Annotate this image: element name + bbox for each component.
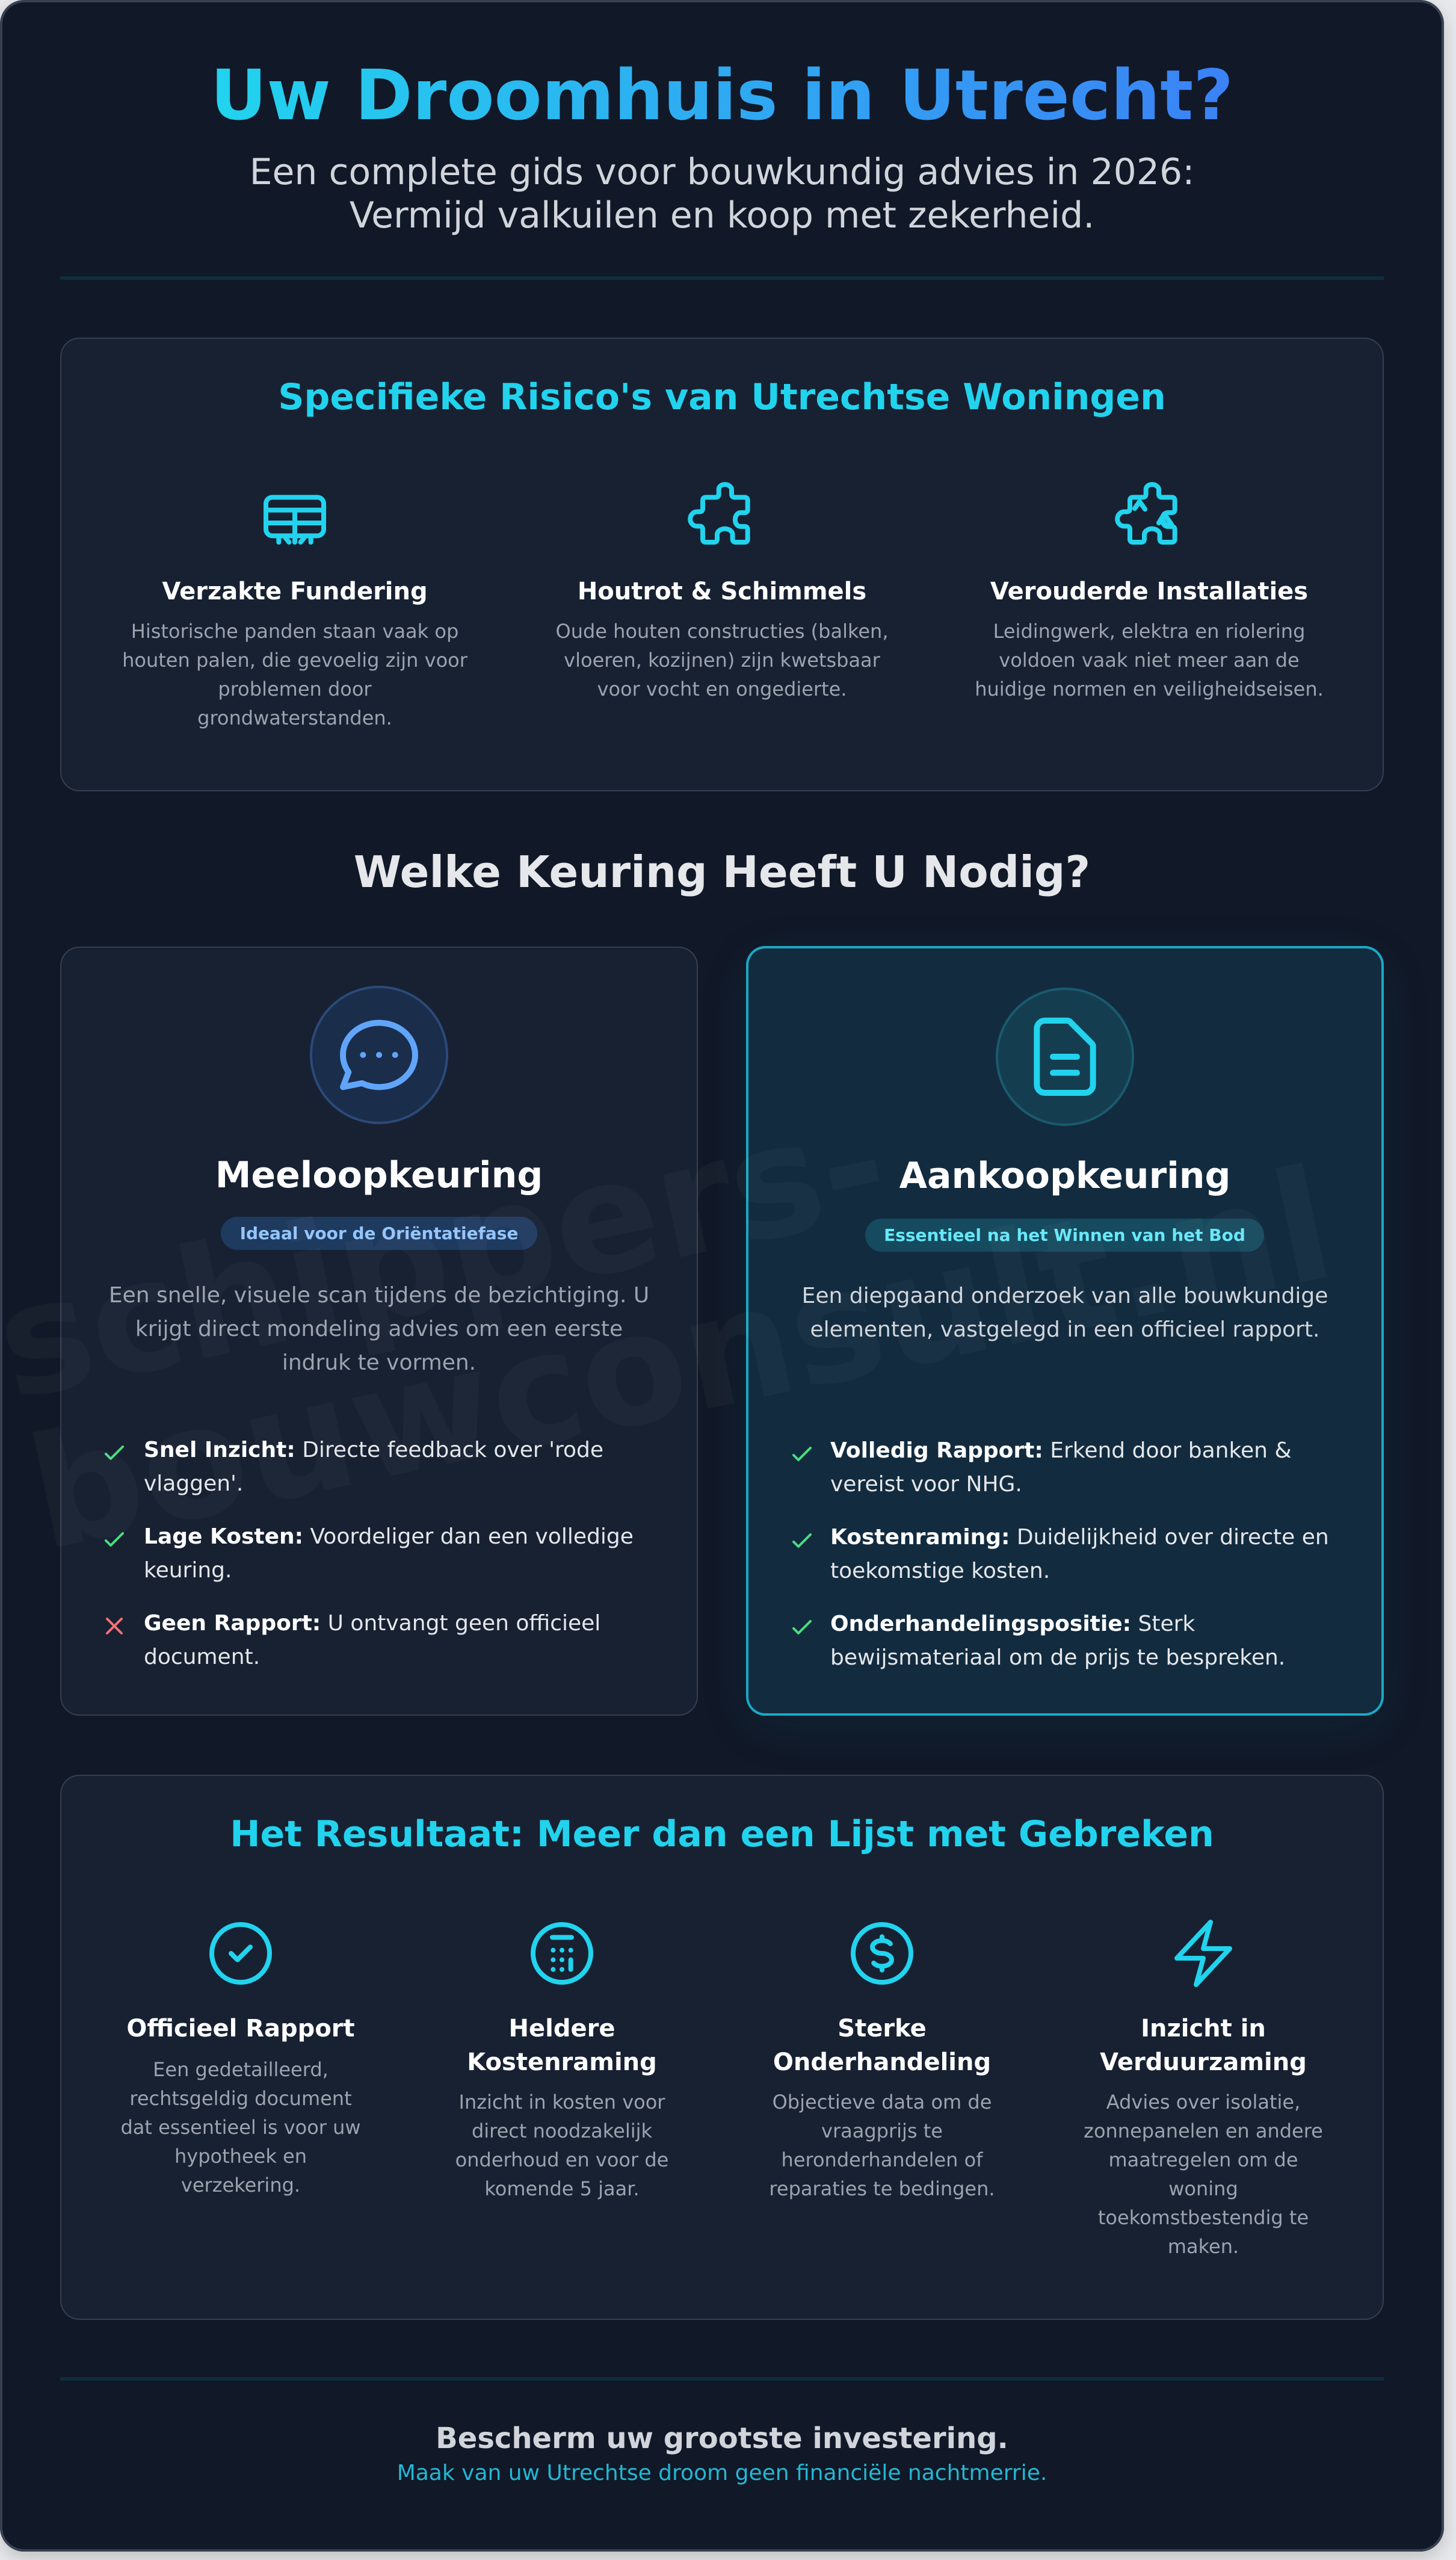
subtitle: Een complete gids voor bouwkundig advies in 2026: bbox=[250, 151, 1194, 193]
list item: Onderhandelingspositie: Sterk bbox=[830, 1612, 1195, 1636]
list item bbox=[830, 1525, 1329, 1583]
benefit title: Sterke bbox=[838, 2015, 927, 2042]
benefit text: Advies over isolatie, bbox=[1106, 2091, 1300, 2113]
footer headline: Bescherm uw grootste investering. bbox=[436, 2422, 1008, 2455]
benefit text bbox=[1053, 2088, 1354, 2261]
panel: aankoopkeuring bbox=[746, 946, 1384, 1716]
icon: check bbox=[105, 1532, 124, 1547]
panel: het resultaat bbox=[60, 1775, 1384, 2320]
benefit text bbox=[412, 2088, 712, 2203]
icon: check bbox=[792, 1447, 812, 1461]
benefit text: zonnepanelen en andere bbox=[1084, 2119, 1323, 2142]
risk text bbox=[975, 620, 1324, 700]
risk text: Oude houten constructies (balken, bbox=[556, 620, 888, 643]
benefit title bbox=[1053, 2012, 1354, 2079]
benefit title: Officieel Rapport bbox=[126, 2015, 355, 2042]
subtitle: Vermijd valkuilen en koop met zekerheid. bbox=[350, 194, 1094, 237]
watermark: bouwconsult.nl bbox=[15, 1135, 1346, 1586]
icon: dollar circle bbox=[844, 1915, 921, 1992]
benefit text: onderhoud en voor de bbox=[455, 2148, 668, 2171]
benefit text: heronderhandelen of bbox=[782, 2148, 982, 2171]
badge bbox=[221, 1217, 537, 1250]
panel: specifieke risico's bbox=[60, 338, 1384, 791]
risk: houtrot en schimmels bbox=[556, 482, 888, 700]
benefit title: Verduurzaming bbox=[1100, 2048, 1307, 2076]
card description: Een diepgaand onderzoek van alle bouwkundige bbox=[802, 1284, 1328, 1308]
card title: Meeloopkeuring bbox=[215, 1154, 543, 1196]
heading: risico's: Specifieke Risico's van Utrechtse Woningen bbox=[278, 376, 1166, 418]
benefit text: verzekering. bbox=[181, 2174, 300, 2197]
benefit text: maken. bbox=[1168, 2235, 1239, 2258]
benefit text: vraagprijs te bbox=[821, 2119, 943, 2142]
list item: toekomstige kosten. bbox=[830, 1559, 1050, 1583]
risk: verzakte fundering bbox=[122, 495, 467, 729]
list item: Geen Rapport: U ontvangt geen officieel bbox=[144, 1611, 600, 1636]
icon: puzzle with marks bbox=[1115, 482, 1177, 545]
benefit title: Inzicht in bbox=[1141, 2015, 1266, 2042]
benefit text: dat essentieel is voor uw bbox=[120, 2116, 361, 2139]
icon: puzzle piece bbox=[688, 482, 750, 545]
benefit text: maatregelen om de bbox=[1108, 2148, 1298, 2171]
risk text: huidige normen en veiligheidseisen. bbox=[975, 678, 1324, 700]
benefit text: komende 5 jaar. bbox=[484, 2177, 640, 2200]
list item: keuring. bbox=[144, 1558, 232, 1583]
heading: welke keuring: Welke Keuring Heeft U Nodig? bbox=[354, 847, 1090, 897]
footer tagline: Maak van uw Utrechtse droom geen financiële nachtmerrie. bbox=[397, 2461, 1047, 2485]
list item bbox=[830, 1438, 1292, 1497]
icon: check bbox=[105, 1445, 124, 1460]
icon: calculator circle bbox=[523, 1915, 600, 1992]
icon: document bbox=[996, 988, 1134, 1126]
badge: Essentieel na het Winnen van het Bod bbox=[884, 1225, 1245, 1245]
risk text: voldoen vaak niet meer aan de bbox=[999, 649, 1300, 672]
benefit title: Kostenraming bbox=[467, 2048, 657, 2076]
benefit text: toekomstbestendig te bbox=[1098, 2206, 1309, 2229]
card description: Een snelle, visuele scan tijdens de bezichtiging. U bbox=[109, 1283, 649, 1308]
benefit text: rechtsgeldig document bbox=[129, 2087, 352, 2110]
benefit text bbox=[90, 2055, 391, 2200]
icon: bolt bbox=[1165, 1915, 1242, 1992]
card description bbox=[109, 1283, 649, 1375]
card description: elementen, vastgelegd in een officieel rapport. bbox=[810, 1317, 1319, 1342]
title: Uw Droomhuis in Utrecht? bbox=[211, 55, 1233, 136]
benefit text: Inzicht in kosten voor bbox=[459, 2091, 665, 2113]
risk text: problemen door bbox=[218, 678, 372, 700]
list item: Volledig Rapport: Erkend door banken & bbox=[830, 1438, 1292, 1463]
list item: Snel Inzicht: Directe feedback over 'rode bbox=[144, 1438, 603, 1462]
list item bbox=[830, 1607, 1285, 1675]
card description: krijgt direct mondeling advies om een eerste bbox=[135, 1317, 623, 1341]
benefit text bbox=[732, 2088, 1032, 2203]
benefit: sterke onderhandeling bbox=[732, 1915, 1032, 2300]
icon: cross bbox=[106, 1618, 123, 1634]
benefit title: Onderhandeling bbox=[773, 2048, 991, 2076]
list item: vereist voor NHG. bbox=[830, 1472, 1022, 1497]
benefit: heldere kostenraming bbox=[412, 1915, 712, 2300]
list item: Lage Kosten: Voordeliger dan een volledige bbox=[144, 1524, 634, 1549]
icon: check circle bbox=[202, 1915, 279, 1992]
panel: meeloopkeuring bbox=[60, 947, 698, 1716]
list item: vlaggen'. bbox=[144, 1471, 243, 1496]
list item bbox=[144, 1438, 603, 1496]
benefit text: direct noodzakelijk bbox=[472, 2119, 652, 2142]
list item bbox=[144, 1524, 634, 1583]
benefit text: Een gedetailleerd, bbox=[153, 2058, 329, 2081]
benefit text: reparaties te bedingen. bbox=[769, 2177, 995, 2200]
risk text: vloeren, kozijnen) zijn kwetsbaar bbox=[564, 649, 880, 672]
list item: document. bbox=[144, 1645, 260, 1669]
footer bbox=[0, 2420, 1444, 2499]
list item bbox=[144, 1611, 600, 1669]
badge: Ideaal voor de Oriëntatiefase bbox=[240, 1223, 518, 1243]
risk text: Leidingwerk, elektra en riolering bbox=[993, 620, 1305, 643]
benefit: officieel rapport bbox=[90, 1915, 391, 2300]
list item: Kostenraming: Duidelijkheid over directe en bbox=[830, 1525, 1329, 1550]
icon: foundation bbox=[264, 495, 326, 545]
risk text: voor vocht en ongedierte. bbox=[597, 678, 847, 700]
benefit text: hypotheek en bbox=[174, 2145, 307, 2168]
benefit title: Heldere bbox=[509, 2015, 615, 2042]
card description: indruk te vormen. bbox=[282, 1350, 476, 1375]
heading: resultaat: Het Resultaat: Meer dan een Lijst met Gebreken bbox=[230, 1813, 1214, 1855]
benefit text: woning bbox=[1168, 2177, 1238, 2200]
card description bbox=[802, 1284, 1328, 1342]
risk text bbox=[122, 620, 467, 729]
card title: Aankoopkeuring bbox=[899, 1155, 1230, 1197]
risk text: Historische panden staan vaak op bbox=[131, 620, 458, 643]
icon: check bbox=[792, 1533, 812, 1548]
risk text: houten palen, die gevoelig zijn voor bbox=[122, 649, 467, 672]
risk text: grondwaterstanden. bbox=[197, 706, 392, 729]
benefit title bbox=[732, 2012, 1032, 2079]
risk text bbox=[556, 620, 888, 700]
risk title: Verouderde Installaties bbox=[990, 578, 1308, 605]
icon: check bbox=[792, 1620, 812, 1634]
badge bbox=[865, 1219, 1264, 1252]
risk title: Houtrot & Schimmels bbox=[578, 578, 866, 605]
subtitle bbox=[250, 151, 1194, 237]
benefit title bbox=[412, 2012, 712, 2079]
benefit: inzicht in verduurzaming bbox=[1053, 1915, 1354, 2300]
watermark: schippers- bbox=[0, 1072, 902, 1435]
risk: verouderde installaties bbox=[975, 482, 1324, 700]
icon: chat bubble bbox=[310, 986, 448, 1124]
risk title: Verzakte Fundering bbox=[162, 578, 428, 605]
list item: bewijsmateriaal om de prijs te bespreken. bbox=[830, 1645, 1285, 1670]
benefit text: Objectieve data om de bbox=[773, 2091, 992, 2113]
